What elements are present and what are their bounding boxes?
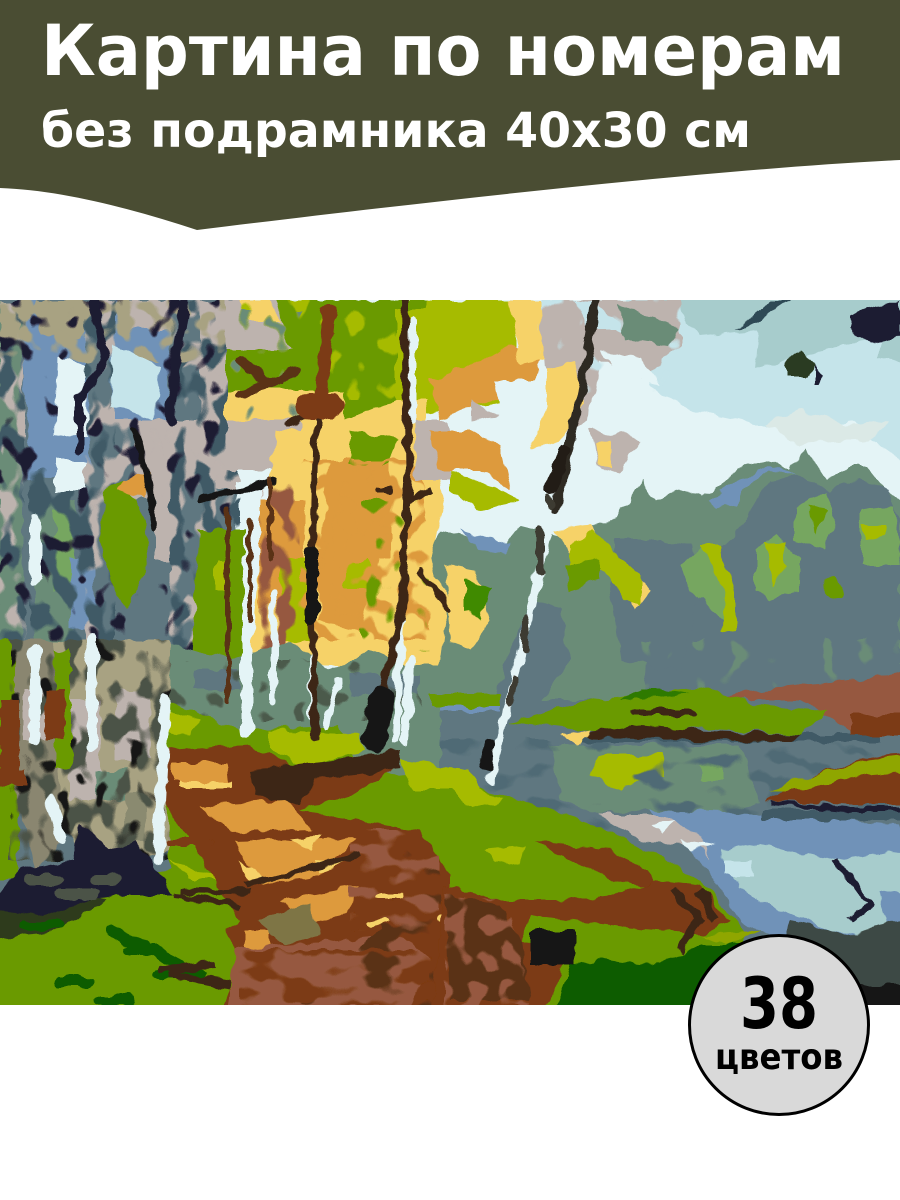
badge number: 38 [740, 963, 818, 1045]
main trunk and lower tree masses [0, 640, 440, 880]
foliage: green and golden crowns [190, 300, 680, 665]
foliage blotches [225, 300, 430, 660]
header banner [0, 0, 900, 230]
badge label: цветов [715, 1037, 843, 1078]
title: Картина по номерам [41, 10, 845, 92]
path blotches [240, 830, 450, 1005]
ground: green and path [0, 700, 745, 1030]
distant forest [414, 448, 900, 702]
badge: 38 colours [690, 936, 868, 1114]
painting: birch forest by a river [0, 280, 900, 1030]
sky [234, 300, 900, 670]
right bank and river islands [430, 665, 900, 890]
foreground brown bank and bushes [431, 858, 900, 1005]
left tree trunks background [0, 280, 240, 920]
tree bark blotches [0, 300, 240, 660]
white birch trunks [35, 320, 550, 860]
subtitle: без подрамника 40х30 см [41, 103, 751, 159]
dark roots at tree base [0, 825, 175, 915]
lower bark blotches [10, 640, 170, 860]
upper right overhanging branch [735, 300, 900, 385]
water [439, 696, 900, 942]
dark tree branches and birch marks [80, 300, 595, 765]
